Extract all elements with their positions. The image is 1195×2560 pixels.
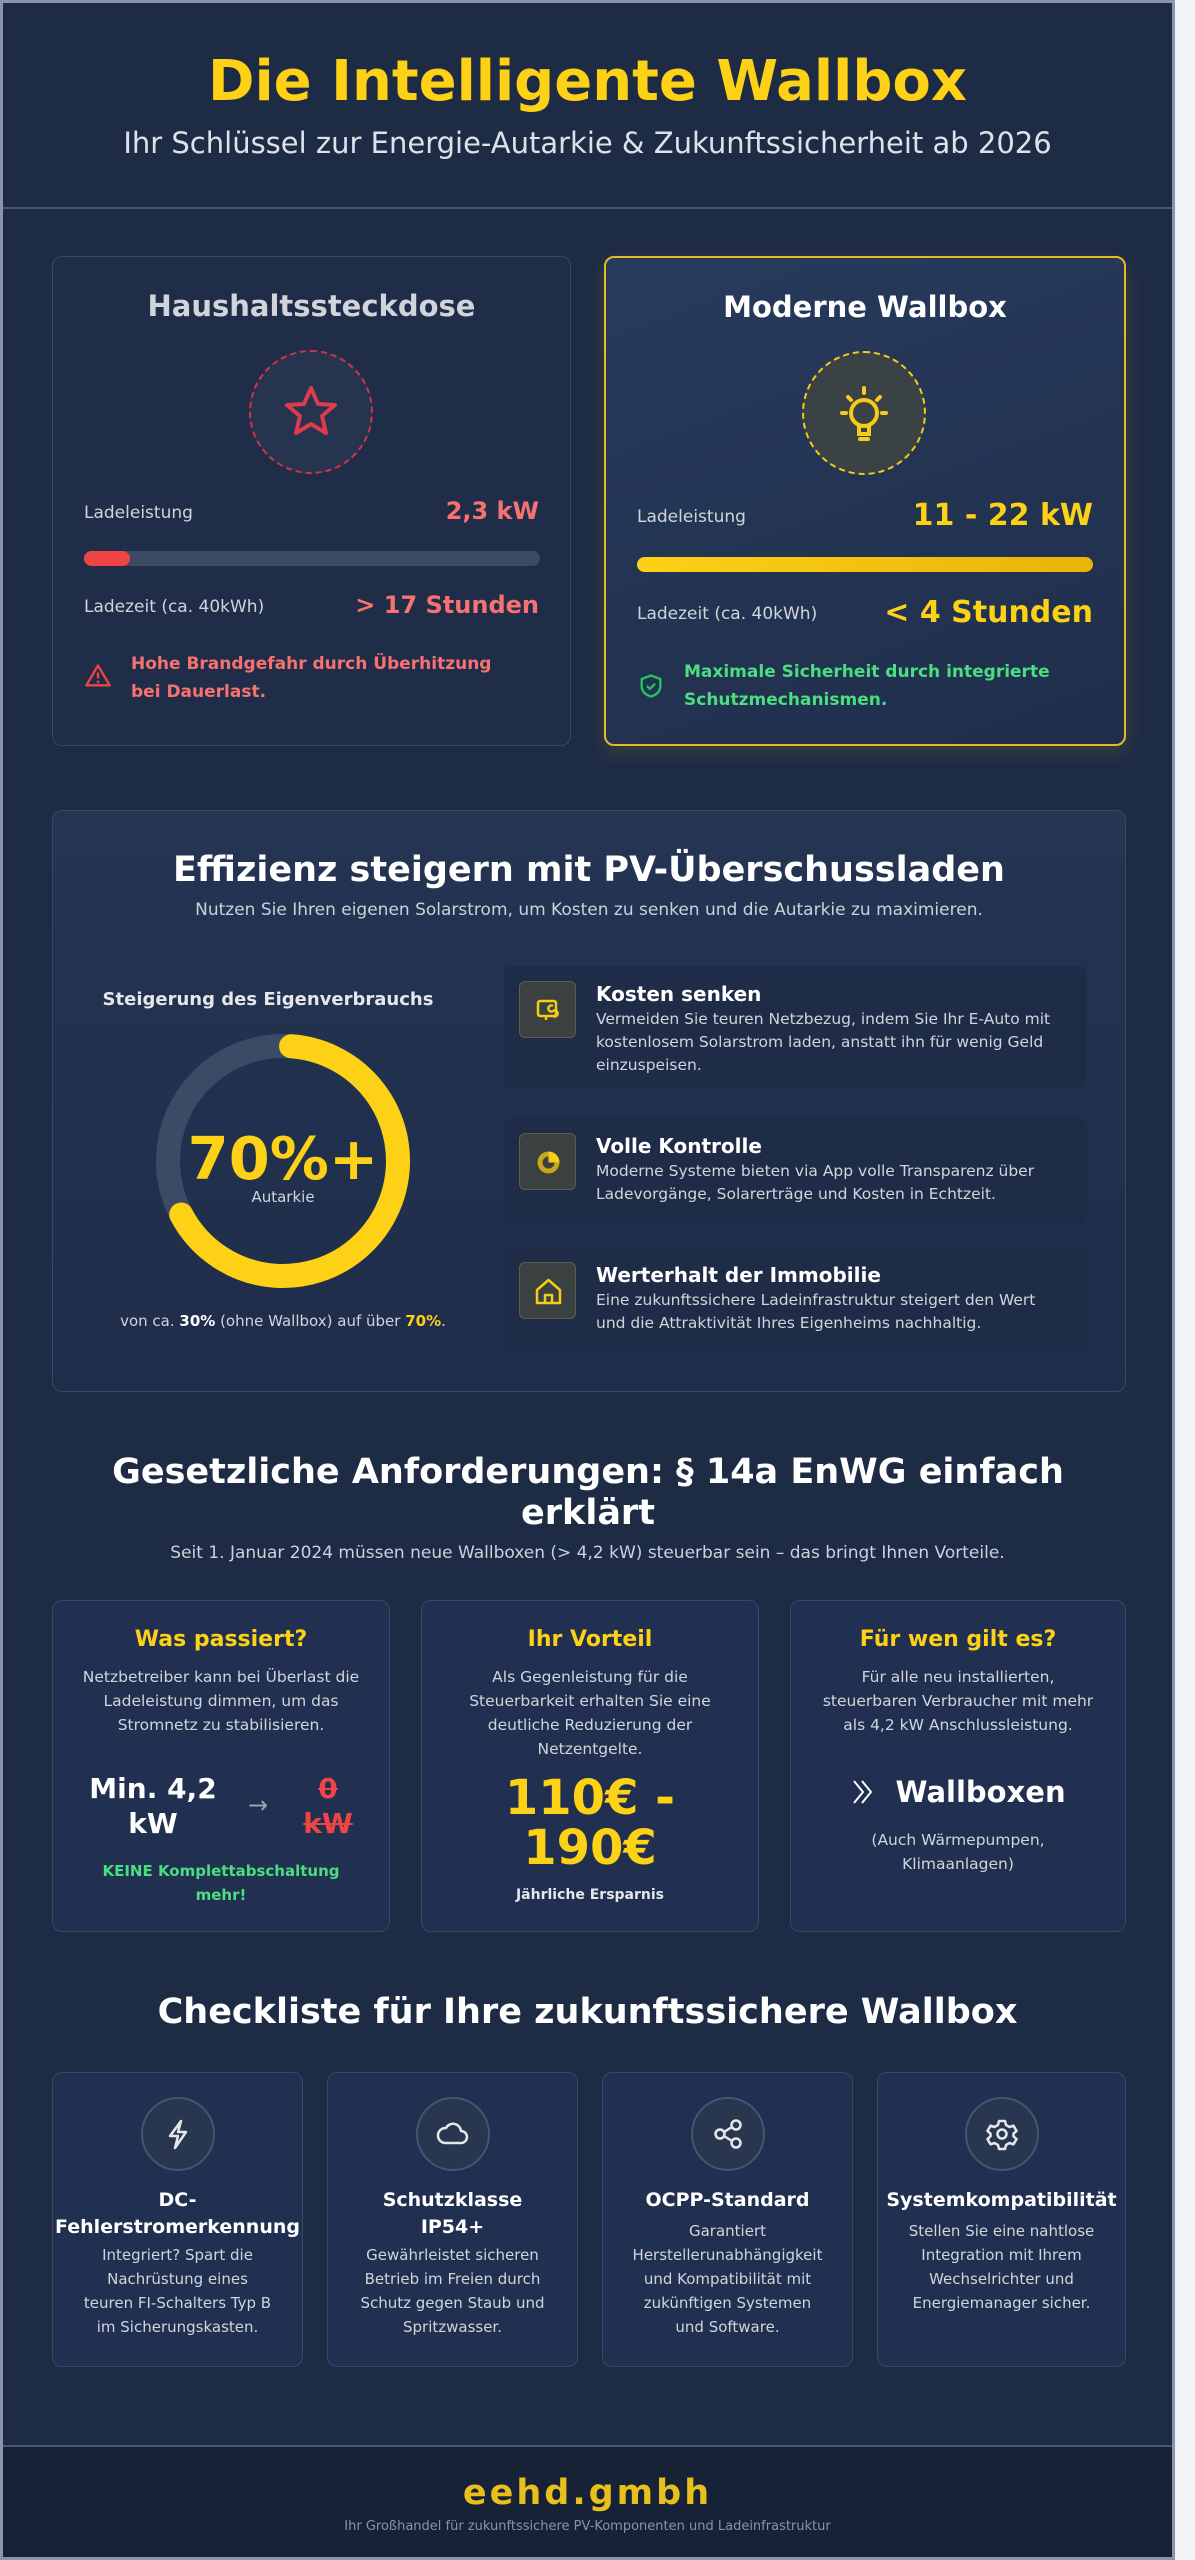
card: ip54: Betrieb im Freien durch [365,2270,540,2288]
card: fuer wen: Für wen gilt es? [860,1627,1056,1652]
graphic: power reduction: → [248,1791,268,1819]
graphic: power reduction: Min. 4,2 kW [89,1772,217,1840]
card: systemkompatibilitaet: Energiemanager sicher. [913,2294,1090,2312]
label: ladeleistung: Ladeleistung [84,503,193,523]
graphic: power reduction [89,1772,353,1840]
icon: chart [519,1133,576,1190]
heading: Effizienz steigern mit PV-Überschussladen [173,850,1005,890]
icon + label: Wallboxen [895,1775,1066,1809]
safety note: Maximale Sicherheit durch integrierte [684,662,1050,682]
card: ihr vorteil: Als Gegenleistung für die [492,1668,688,1686]
card: dc: Fehlerstromerkennung [55,2216,300,2238]
card: ip54: Spritzwasser. [403,2318,502,2336]
card: ocpp: zukünftigen Systemen [644,2294,811,2312]
card: ip54: Gewährleistet sicheren [366,2246,539,2264]
chart: donut: von ca. 30% (ohne Wallbox) auf über 70%. [120,1312,446,1330]
chart: donut [103,989,446,1330]
card: ip54 [327,2072,578,2367]
icon: lightbulb [802,351,926,475]
warning: bei Dauerlast. [131,682,266,702]
subheading: Nutzen Sie Ihren eigenen Solarstrom, um Kosten zu senken und die Autarkie zu maximieren. [195,900,983,920]
card: ihr vorteil: Jährliche Ersparnis [516,1887,664,1903]
item: volle kontrolle: Volle Kontrolle [596,1134,762,1158]
item: kosten senken: Vermeiden Sie teuren Netzbezug, indem Sie Ihr E-Auto mit kostenlosem Solarstrom laden, anstatt ihn für wenig Geld einzuspeisen. [596,1010,1050,1074]
heading: gesetzliche anforderungen: Gesetzliche Anforderungen: § 14a EnWG einfach erklärt [112,1452,1064,1533]
card: ip54: Schutzklasse [383,2189,522,2211]
card: ihr vorteil: 190€ [523,1820,657,1876]
card: ihr vorteil: 110€ - [505,1770,675,1826]
panel: moderne wallbox [604,256,1126,746]
heading: Haushaltssteckdose [148,289,475,323]
card: ocpp [602,2072,853,2367]
panel: haushaltssteckdose [52,256,571,746]
item: werterhalt: Werterhalt der Immobilie [596,1263,881,1287]
card: fuer wen: als 4,2 kW Anschlussleistung. [843,1716,1073,1734]
icon: star [249,350,373,474]
card: dc: teuren FI-Schalters Typ B [84,2294,271,2312]
header [3,3,1172,209]
heading: checkliste: Checkliste für Ihre zukunftssichere Wallbox [158,1992,1017,2032]
footer [3,2445,1172,2557]
graphic: power reduction: 0 kW [303,1772,353,1840]
card: ip54: IP54+ [421,2216,484,2238]
card: fuer wen: steuerbaren Verbraucher mit mehr [823,1692,1093,1710]
card: dc: im Sicherungskasten. [97,2318,258,2336]
card: systemkompatibilitaet: Stellen Sie eine nahtlose [909,2222,1094,2240]
item: werterhalt [504,1247,1087,1355]
label: Ladeleistung [637,507,746,527]
value: < 4 Stunden [884,595,1093,630]
ladezeit: Ladezeit (ca. 40kWh) [637,604,817,624]
card: ihr vorteil: Netzentgelte. [537,1740,642,1758]
card: ocpp: OCPP-Standard [645,2189,810,2211]
safety note [640,662,1050,710]
card: ihr vorteil [421,1600,759,1932]
bar [637,557,1093,572]
card: systemkompatibilitaet: Integration mit Ihrem [921,2246,1082,2264]
card: was passiert [52,1600,390,1932]
card: systemkompatibilitaet: Systemkompatibilität [886,2189,1117,2211]
icon: money [519,981,576,1038]
value: 11 - 22 kW [913,498,1093,533]
card: fuer wen: (Auch Wärmepumpen, [871,1831,1045,1849]
card: was passiert: KEINE Komplettabschaltung mehr! [102,1862,340,1904]
card: ocpp: und Software. [675,2318,780,2336]
card: systemkompatibilitaet: Wechselrichter und [929,2270,1074,2288]
card: dc [52,2072,303,2367]
card: dc: Integriert? Spart die [102,2246,253,2264]
card: dc: Nachrüstung eines [107,2270,248,2288]
panel: pv-ueberschussladen [52,810,1126,1392]
icon: house [519,1262,576,1319]
chart: donut: Steigerung des Eigenverbrauchs [103,989,433,1010]
chart: donut: 70%+ [188,1124,378,1193]
card: ip54: Schutz gegen Staub und [360,2294,544,2312]
warning [85,653,491,702]
item: volle kontrolle: Moderne Systeme bieten via App volle Transparenz über Ladevorgänge, Solarerträge und Kosten in Echtzeit. [596,1162,1034,1203]
chart: donut: Autarkie [251,1188,315,1206]
card: ihr vorteil: Ihr Vorteil [528,1627,652,1652]
brand: eehd.gmbh [463,2473,712,2513]
bar [84,551,540,566]
tagline: Ihr Großhandel für zukunftssichere PV-Komponenten und Ladeinfrastruktur [344,2519,831,2534]
safety note: Schutzmechanismen. [684,690,887,710]
value: > 17 Stunden [355,591,539,619]
item: kosten senken [504,966,1087,1089]
card: ihr vorteil: deutliche Reduzierung der [488,1716,692,1734]
card: ihr vorteil: Steuerbarkeit erhalten Sie eine [469,1692,711,1710]
item: kosten senken: Kosten senken [596,982,761,1006]
card: was passiert: Stromnetz zu stabilisieren. [118,1716,324,1734]
card: fuer wen: Für alle neu installierten, [862,1668,1054,1686]
item: werterhalt: Eine zukunftssichere Ladeinfrastruktur steigert den Wert und die Attraktivität Ihres Eigenheims nachhaltig. [596,1291,1035,1332]
card: was passiert: Was passiert? [135,1627,307,1652]
card: fuer wen [790,1600,1126,1932]
card: was passiert: Ladeleistung dimmen, um das [103,1692,339,1710]
heading: Moderne Wallbox [723,290,1007,324]
title: Die Intelligente Wallbox [208,49,967,114]
card: ocpp: und Kompatibilität mit [644,2270,811,2288]
ladezeit: Ladezeit (ca. 40kWh) [84,597,264,617]
item: volle kontrolle [504,1118,1087,1225]
card: dc: DC- [158,2189,197,2211]
warning: Hohe Brandgefahr durch Überhitzung [131,654,491,674]
card: systemkompatibilitaet [877,2072,1126,2367]
card: fuer wen: Klimaanlagen) [902,1855,1014,1873]
card: was passiert: Netzbetreiber kann bei Überlast die [83,1668,359,1686]
subheading: Seit 1. Januar 2024 müssen neue Wallboxen (> 4,2 kW) steuerbar sein – das bringt Ihnen Vorteile. [170,1543,1005,1563]
card: ocpp: Garantiert [689,2222,766,2240]
card: ocpp: Herstellerunabhängigkeit [633,2246,822,2264]
value: 2,3 kW [446,497,539,525]
subtitle: Ihr Schlüssel zur Energie-Autarkie & Zukunftssicherheit ab 2026 [123,126,1052,160]
